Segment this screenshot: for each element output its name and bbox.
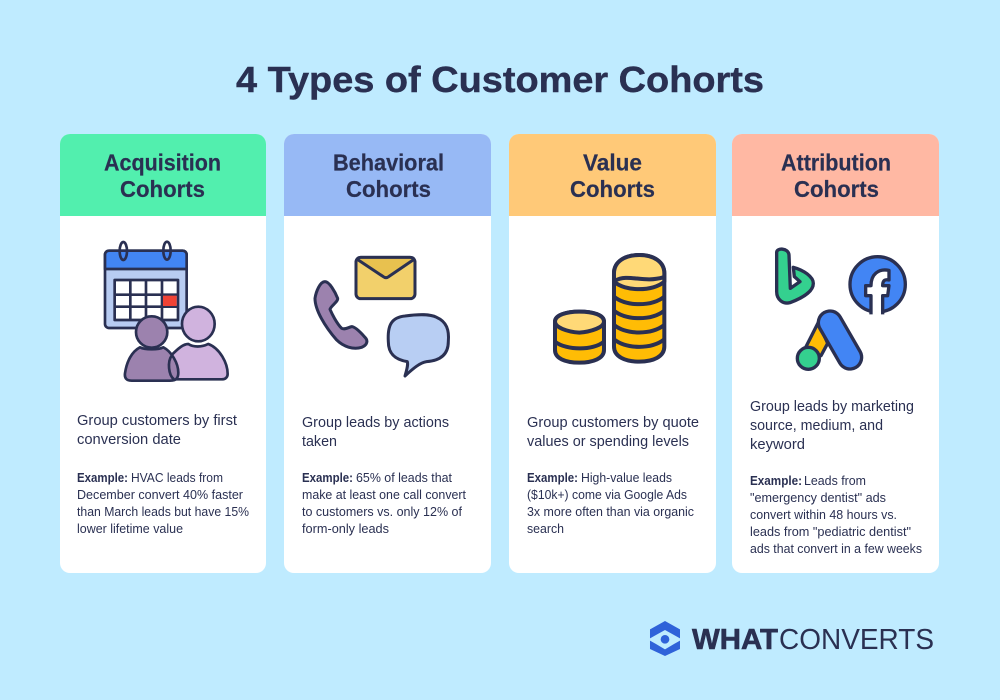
- icon: calendar with people: [105, 242, 228, 381]
- text: behavioral description: [302, 414, 449, 450]
- panel: attribution cohorts: [732, 134, 939, 573]
- panel: behavioral cohorts: [284, 134, 491, 573]
- text: acquisition description: conversion date: [77, 431, 181, 448]
- text: behavioral example: to customers vs. only 12% of: [302, 505, 463, 519]
- text: attribution example: convert within 48 hours vs.: [750, 508, 897, 522]
- text: value example: High-value leads: [581, 471, 672, 485]
- text: attribution example: ads that convert in a few weeks: [750, 542, 922, 556]
- icon: ad platform logos: [777, 249, 905, 369]
- panel: value cohorts: [509, 134, 716, 573]
- text: value description: values or spending levels: [527, 433, 689, 450]
- header: value: Value: [583, 150, 642, 176]
- header: behavioral: Behavioral: [333, 150, 444, 176]
- header: value: Cohorts: [570, 176, 655, 202]
- text: acquisition example: Example:: [77, 471, 128, 485]
- text: behavioral example: form-only leads: [302, 522, 389, 536]
- text: acquisition description: [77, 412, 238, 448]
- header: behavioral: [284, 134, 491, 216]
- text: behavioral description: taken: [302, 433, 337, 450]
- text: acquisition example: lower lifetime value: [77, 522, 183, 536]
- header: acquisition: Cohorts: [120, 176, 205, 202]
- text: acquisition example: December convert 40% faster: [77, 488, 243, 502]
- text: value example: Example:: [527, 471, 578, 485]
- text: behavioral example: Example:: [302, 471, 353, 485]
- text: value description: [527, 414, 699, 450]
- text: acquisition example: than March leads but have 15%: [77, 505, 249, 519]
- text: acquisition example: [77, 471, 249, 536]
- icon: phone, envelope, speech bubble: [315, 257, 449, 376]
- text: attribution example: Leads from: [804, 474, 866, 488]
- text: value example: 3x more often than via organic: [527, 505, 694, 519]
- panel: acquisition cohorts: [60, 134, 266, 573]
- text: behavioral description: Group leads by actions: [302, 414, 449, 431]
- title: 4 Types of Customer Cohorts: [236, 59, 764, 100]
- text: attribution example: leads from "pediatric dentist": [750, 525, 911, 539]
- text: attribution example: "emergency dentist" ads: [750, 491, 886, 505]
- text: acquisition description: Group customers by first: [77, 412, 238, 429]
- header: acquisition: Acquisition: [104, 150, 221, 176]
- text: attribution description: [750, 398, 914, 453]
- text: attribution example: Example:: [750, 474, 802, 488]
- icon: coin stacks: [555, 255, 664, 363]
- header: attribution: Cohorts: [794, 176, 879, 202]
- header: behavioral: Cohorts: [346, 176, 431, 202]
- header: attribution: Attribution: [781, 150, 891, 176]
- text: attribution description: source, medium, and: [750, 417, 883, 434]
- header: acquisition: [60, 134, 266, 216]
- text: acquisition example: HVAC leads from: [131, 471, 223, 485]
- text: behavioral example: 65% of leads that: [356, 471, 453, 485]
- logo: WhatConverts: [650, 621, 934, 656]
- text: behavioral example: [302, 471, 467, 536]
- text: value example: search: [527, 522, 564, 536]
- text: attribution description: keyword: [750, 436, 805, 453]
- logo: WhatConverts: CONVERTS: [779, 624, 934, 656]
- text: attribution description: Group leads by marketing: [750, 398, 914, 415]
- text: behavioral example: make at least one call convert: [302, 488, 467, 502]
- wordmark: WHAT: [692, 624, 778, 656]
- text: value example: [527, 471, 694, 536]
- text: value description: Group customers by quote: [527, 414, 699, 431]
- header: value: [509, 134, 716, 216]
- header: attribution: [732, 134, 939, 216]
- icon: logo hexagon: [650, 621, 680, 656]
- text: attribution example: [750, 474, 922, 556]
- text: value example: ($10k+) come via Google Ads: [527, 488, 687, 502]
